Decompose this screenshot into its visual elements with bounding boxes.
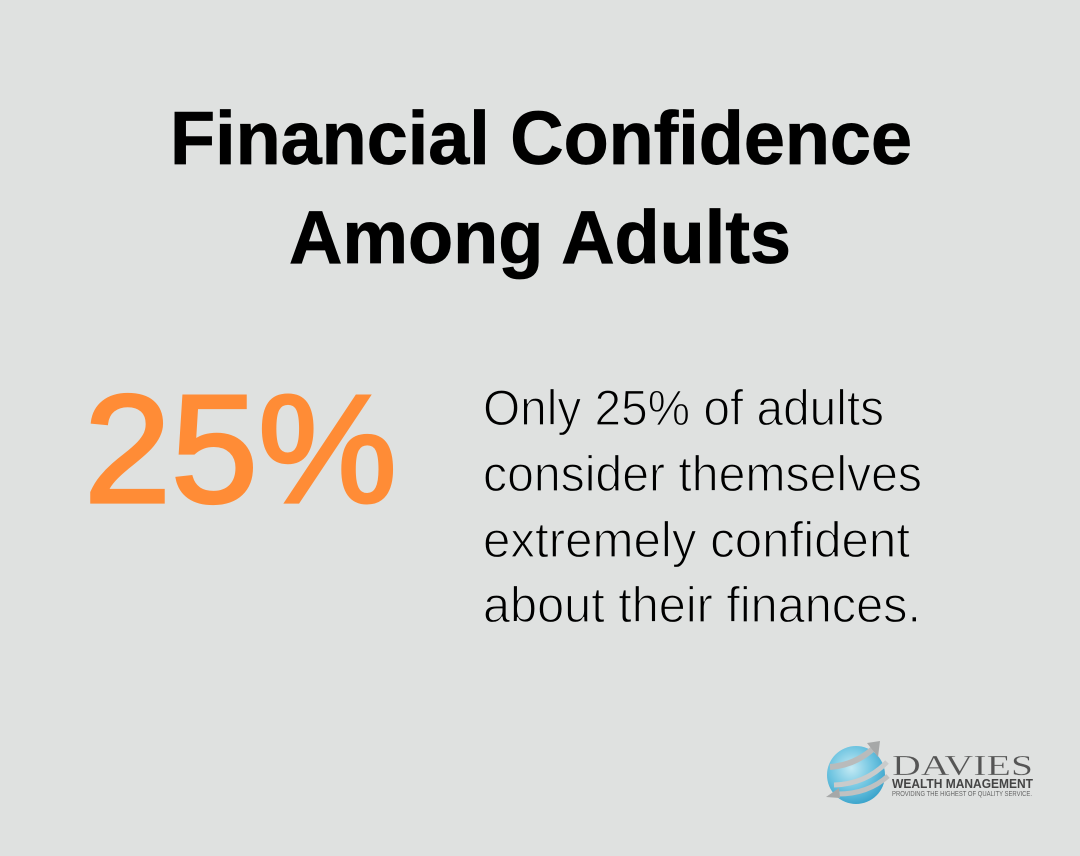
title: Among Adults [289, 195, 791, 279]
title: Financial Confidence [170, 96, 912, 180]
description text [483, 380, 922, 633]
description text: extremely confident [483, 512, 910, 568]
description text: Only 25% of adults [483, 380, 884, 436]
icon: globe with arrows [826, 741, 888, 804]
description text: about their finances. [483, 577, 921, 633]
logo: Davies Wealth Management [826, 741, 1033, 804]
big statistic: 25%: 25% [84, 363, 397, 535]
logo tagline: PROVIDING THE HIGHEST OF QUALITY SERVICE. [892, 789, 1032, 798]
title [170, 96, 912, 279]
logo wordmark: DAVIES [892, 750, 1033, 782]
logo subtitle: WEALTH MANAGEMENT [892, 776, 1033, 791]
description text: consider themselves [483, 446, 922, 502]
